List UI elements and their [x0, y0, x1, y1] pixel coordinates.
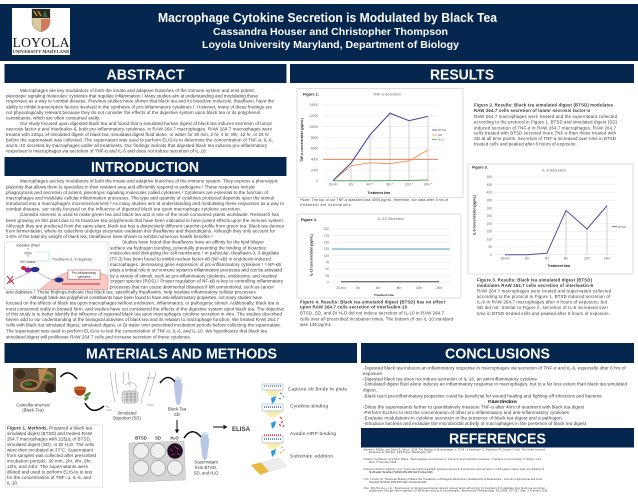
abstract text: ability to inhibit transcription factors involved in the synthesis of pro-inflammatory cytokines.². However, many of these findings are — [6, 105, 272, 110]
chart: figure 2 TNF-alpha secretion: 12000 — [309, 114, 318, 118]
heading: materials and methods: MATERIALS AND METHODS — [86, 346, 277, 362]
introduction text: focused on the effects of black tea upon macrophages without endotoxin, inflammatory, or pathogenic stimuli. Additionally, black tea is — [6, 301, 280, 306]
chart: figure 4 IL-10 secretion: Treatment time — [374, 293, 394, 297]
callout: figure 1 methods: for the concentration of TNF- α, IL-6, and — [7, 475, 91, 480]
chart: figure 4 IL-10 secretion: IL-10 Secretion — [378, 217, 404, 221]
abstract text — [6, 88, 274, 154]
caption: figure 3: SD did not. Similar to Figure 2, secretion of IL-6 increased over — [477, 305, 609, 310]
introduction text: The supernatant was used to perform ELISAs to test the concentration of TNF-α, IL-6, and IL-10. We hypothesize that black tea — [6, 329, 267, 334]
icon: black tea SD tube — [174, 377, 182, 405]
title: Macrophage Cytokine Secretion is Modulated by Black Tea — [158, 11, 498, 25]
chart: figure 3 IL-6 secretion: Treatment time — [548, 264, 571, 268]
note: TNF standard: *Note: The top of our TNF-α standard was 4000 pg/mL; therefore, our data after 4 hrs of — [300, 198, 448, 202]
chart: figure 2 TNF-alpha secretion: 4000 — [311, 158, 318, 162]
label: supernatant: SD, and H₂O — [194, 470, 219, 476]
chart: figure 2 TNF-alpha secretion: Figure 2. — [303, 92, 319, 96]
chart: figure 3 IL-6 secretion: 300 — [487, 206, 492, 210]
figure: NF-kB pathway diagram: IKK kinase — [20, 260, 36, 264]
introduction text: Although black tea polyphenol constituents have been found to have anti-inflammatory properties, not many studies have — [30, 295, 262, 300]
chart: figure 2 TNF-alpha secretion: TNF-α Secretion — [373, 92, 401, 96]
figure: NF-kB pathway diagram — [4, 242, 108, 290]
logo — [12, 8, 70, 55]
chart: figure 4 IL-10 secretion: 24hr — [436, 286, 443, 290]
authors: Cassandra Houser and Christopher Thompson — [213, 26, 448, 38]
label: plate columns: H₂O — [170, 436, 179, 441]
step 2: cytokine binding — [262, 404, 283, 417]
chart: figure 3 IL-6 secretion: IL-6 Secretion — [542, 168, 566, 172]
label: supernatant — [194, 460, 219, 476]
legend — [612, 225, 627, 229]
introduction text: oxygen species (ROS).⁵ Proper regulation of NF-κB is key to controlling inflammatory — [110, 279, 284, 284]
label: simulated digestion — [113, 410, 142, 421]
icon: supernatant tube — [200, 432, 209, 460]
note: TNF standard: treatment are estimations. — [300, 203, 352, 207]
heading: references — [361, 428, 634, 448]
introduction text: most consumed orally in brewed form, and studies have not considered the effects of the digestive system upon black tea. The objective — [6, 306, 284, 311]
abstract text: pleiotropic signaling molecules: cytokines that regulate inflammation.¹ Many studies aim at understanding and modulating these — [6, 93, 258, 98]
introduction text — [6, 179, 285, 339]
introduction text: plasticity that allows them to specialize in their resident area and efficiently respond to pathogens.¹ These responses include — [6, 184, 255, 189]
introduction text: and diabetes.⁵ These findings indicate that black tea, specifically theaflavins, help mediate inflammatory cellular processes. — [6, 290, 257, 295]
conclusions text: -Evaluate modulations in cytokine secretion in the presence of black tea digest and a pathogen. — [363, 415, 563, 420]
panel: conclusions — [361, 343, 634, 426]
labels: ELISA steps — [288, 386, 347, 460]
caption: figure 4: cells over all prescribed incubation times. The bottom of our IL-10 standard — [300, 316, 454, 321]
caption: figure 4: was 135 pg/mL — [300, 322, 332, 327]
icon: tea cup — [73, 386, 91, 401]
icon: digestive system sketch — [106, 372, 156, 410]
abstract text: before the supernatant was collected. The supernatant was used to perform ELISAs to determine the concentration of TNF-α, IL-6, — [6, 138, 273, 143]
chart: figure 2 TNF-alpha secretion: 4hr * — [367, 182, 374, 186]
chart: figure 2 TNF-alpha secretion: Treatment time — [368, 191, 391, 195]
figure: NF-kB pathway diagram: Pro-inflammatory — [72, 271, 97, 275]
abstract text: and IL-10 secreted by macrophages under all treatments. Our findings indicate that digested black tea induces pro-inflammatory — [6, 143, 268, 148]
references text: Web. 5 February 2018. — [369, 461, 397, 464]
caption: figure 2 — [474, 103, 618, 147]
labels: ELISA steps: Cytokine binding — [290, 404, 328, 410]
label: ELISA: ELISA — [232, 427, 251, 433]
chart: figure 3 IL-6 secretion: 12hr — [584, 257, 591, 261]
chart: figure 3 IL-6 secretion: 200 — [487, 222, 492, 226]
label: supernatant: Supernatant — [194, 460, 219, 465]
chart: figure 4 IL-10 secretion: 175 — [324, 234, 329, 238]
step 3: avadin-HRP — [262, 417, 284, 449]
caption: figure 4: Figure 4. Results: Black tea simulated digest (BTSD) has no effect — [300, 299, 446, 304]
references text: ¹Sanders, R Blair, and David E. Vance. 2009. The Biology of Macrophages. p 71-94. In Kaufmann S, Medzhitov R, Gordon S (ed), The Innate Immune — [363, 448, 546, 452]
chart: figure 4 IL-10 secretion: 0 — [327, 280, 329, 284]
chart: figure 3 IL-6 secretion: Figure 3. — [472, 166, 488, 170]
introduction text: surface via hydrogen bonding, potentially preventing the binding of bioactive — [110, 246, 266, 251]
panel: results — [290, 64, 634, 327]
chart: figure 2 TNF-alpha secretion: TNF-α concentration (pg/mL) — [300, 118, 304, 162]
arrow: tea to digestion — [85, 403, 104, 410]
photo: camellia sinensis — [13, 368, 56, 393]
chart: figure 4 IL-10 secretion: IL-10 concentration (pg/mL) — [310, 234, 314, 276]
references text: Chemistry. 59 (2011): 3780-3787. Web. 12 February 2018. — [369, 481, 427, 484]
chart: figure 3 IL-6 secretion: 0 — [490, 253, 492, 257]
caption: figure 4 — [300, 299, 454, 327]
caption: figure 3: RAW 264.7 macrophages were treated and supernatant collected — [477, 289, 612, 294]
figure: NF-kB pathway diagram: Theaflavin-3, 3'-digallate — [52, 258, 92, 262]
caption: figure 3: modulates RAW 264.7 cells secretion of interleukin-6 — [477, 283, 594, 288]
chart: figure 4 IL-10 secretion: 30 min — [336, 286, 346, 290]
abstract text: responses in macrophages via secretion of TNF-α and IL-6 and does not induce secretion of IL-10. — [6, 149, 207, 154]
caption: figure 2: cells treated with BTSD secreted more TNF-α than those treated with — [474, 130, 617, 135]
conclusions text: -Black tea's pro-inflammatory properties could be beneficial for wound healing and fighting off infections and bacteria — [363, 393, 602, 398]
arrow: digestion to black tea SD — [160, 378, 176, 383]
label: camellia sinensis: (Black Tea) — [22, 408, 44, 412]
label: camellia sinensis: Camellia sinensis — [16, 402, 50, 408]
chart: figure 3 IL-6 secretion: 4hr — [545, 257, 550, 261]
introduction text: combat disease, our study focused on the influence of digested black tea upon macrophage cytokine secretion. — [6, 206, 241, 211]
conclusions text: -Dilute the supernatants further to quantitatively measure TNF-α after 4hrs of treatment with black tea digest — [363, 404, 585, 409]
legend: SD — [438, 133, 443, 137]
abstract text: treated with 225μL of simulated digest of black tea, simulated digest fluid alone, or water for 30 min, 2 hr, 4 hr, 8hr, 12 hr, or 24 hr — [6, 132, 270, 137]
chart: figure 4 IL-10 secretion: 2hr — [356, 286, 361, 290]
figure: NF-kB pathway diagram: cytokines — [77, 275, 91, 279]
subheading: future directions: Future Directions — [488, 399, 517, 404]
heading: abstract: ABSTRACT — [106, 66, 184, 84]
introduction text: phagocytosis and secretion of potent, pleiotropic signaling molecules called cytokines.² Cytokines are essential to the function of — [6, 190, 269, 195]
abstract text: Our study focused upon digested black tea and found that a simulated human digest of black tea induces secretion of tumor — [20, 121, 272, 126]
conclusions text: -Perform ELISAs to test the concentration of other pro-inflammatory and anti-inflammatory cytokines — [363, 410, 570, 415]
callout: figure 1 methods: Figure 1. Methods. Prepared a black tea — [7, 426, 92, 431]
heading: references: REFERENCES — [449, 430, 546, 448]
diagram: ELISA steps — [251, 384, 287, 475]
conclusions text: digest. — [363, 388, 377, 393]
chart: figure 2 TNF-alpha secretion: 2hr — [349, 182, 354, 186]
callout: figure 1 methods: IL-10. — [7, 481, 18, 486]
chart: figure 4 IL-10 secretion: 100 — [324, 254, 329, 258]
chart: figure 4 IL-10 secretion: 75 — [325, 260, 329, 264]
heading: results — [290, 64, 634, 84]
chart: figure 3 IL-6 secretion: 250 — [487, 214, 492, 218]
label: supernatant: from BTSD, — [195, 465, 217, 470]
chart: figure 4 IL-10 secretion: 50 — [325, 267, 329, 271]
chart: figure 2 TNF-alpha secretion: 2000 — [311, 168, 318, 172]
introduction text: by a variety of stimuli, such as pro-inflammatory cytokines, endotoxins, and reactive — [110, 273, 277, 278]
introduction text: cells with black tea simulated digest, simulated digest, or DI water over prescribed incubation periods before collecting the supernatant. — [6, 323, 281, 328]
chart: figure 4 IL-10 secretion: 25 — [325, 274, 329, 278]
chart: figure 3 IL-6 secretion: 150 — [487, 230, 492, 234]
references text: ²Chazot, Guillaume, and Marc Dalod. "Macrophages Involvement in Immunity and Infectious diseases". Frontiers in Immunology 5 (2014): 1-12. — [363, 458, 542, 461]
label: black tea SD: SD — [174, 412, 180, 417]
affiliation: Loyola University Maryland, Department of Biology — [202, 39, 459, 51]
chart: figure 4 IL-10 secretion: 4hr — [376, 286, 381, 290]
chart: figure 3 IL-6 secretion: 24hr — [604, 257, 611, 261]
figure: NF-kB pathway diagram: Oxidative stimuli — [16, 244, 40, 248]
introduction text: (TF-3) has been found to inhibit nuclear factor-κB (NF-κB) in endotoxin-induced — [110, 257, 271, 262]
chart: figure 4 IL-10 secretion — [297, 214, 461, 298]
callout: figure 1 methods: 264.7 macrophages with 225μL of BTSD, — [7, 437, 91, 442]
callout: figure 1 methods: incubation periods: 30 min, 2hr, 4hr, 8hr, — [7, 459, 92, 464]
labels: ELISA steps: Capture Ab binds to plate — [288, 386, 347, 392]
arrow: to ELISA — [213, 425, 228, 429]
chart: figure 2 TNF-alpha secretion: 8hr * — [387, 182, 394, 186]
heading: abstract — [4, 64, 286, 84]
caption: figure 4: BTSD, SD, and DI H₂O did not induce secretion of IL-10 in RAW 264.7 — [300, 310, 445, 315]
heading: results: RESULTS — [430, 66, 494, 84]
conclusions text — [363, 366, 627, 426]
caption: figure 3: Figure 3. Results: Black tea simulated digest (BTSD) — [477, 277, 593, 282]
chart: figure 3 IL-6 secretion: 50 — [488, 245, 492, 249]
label: simulated digestion: Digestion (SD) — [113, 416, 142, 421]
label: black tea SD — [168, 407, 187, 417]
chart: figure 3 IL-6 secretion: 30min — [501, 257, 510, 261]
step 4: substrate — [251, 447, 287, 475]
conclusions text: -Digested black tea does not induce secretion of IL-10, an anti-inflammatory cytokine — [363, 376, 537, 381]
caption: figure 4: upon RAW 264.7 cells secretion of interleukin-10 — [300, 305, 408, 310]
callout: figure 1 methods: diluted and used to perform ELISAs to test — [7, 470, 93, 475]
introduction text: processes that can cause detrimental diseases if left unmonitored, such as cancer — [110, 284, 274, 289]
figure: NF-kB pathway diagram: ROS — [25, 252, 31, 256]
caption: figure 3: IL-6 in RAW 264.7 macrophages after 4 hours of exposure, but — [477, 299, 608, 304]
chart: figure 2 TNF-alpha secretion: 12hr * — [405, 182, 414, 186]
introduction text: Macrophages are key modulators of both the innate and adaptive branches of the immune system. They express a phenotypic — [20, 179, 279, 184]
chart: figure 2 TNF-alpha secretion: 30min — [329, 182, 338, 186]
panel: references — [361, 428, 634, 493]
chart: figure 2 TNF-alpha secretion: 24hr * — [424, 182, 433, 186]
panel: abstract — [4, 64, 286, 154]
introduction text: 2-6% of the total dry weight of black tea, theaflavins have shown to exhibit numerous health benefits.⁴ — [6, 234, 213, 239]
callout: figure 1 methods: were then incubated at 37°C. Supernatant — [7, 448, 94, 453]
chart: figure 4 IL-10 secretion: 8hr — [397, 286, 402, 290]
chart: figure 3 IL-6 secretion: IL-6 concentration (pg/mL) — [472, 195, 476, 235]
header banner — [0, 4, 638, 61]
caption: figure 3: according to the protocol in Figure 1. BTSD induced secretion of — [477, 294, 611, 299]
introduction text: been growing on this plant due to its bioactive tea polyphenols that have been indicated to have potent effects upon the immune system. — [6, 218, 284, 223]
conclusions text: -Digested black tea induces an inflammatory response in macrophages via secretion of TNF-α and IL-6, especially after 8 hrs of — [363, 366, 626, 371]
chart: figure 2 TNF-alpha secretion: 10000 — [309, 125, 318, 129]
references text: ³Gutierrez-Orozco, Fabiola, et al. "Green and black tea inhibit cytokine-induced IL-8 production and secretion in AGS gastric cancer cells via inhibition of — [363, 468, 544, 471]
caption: figure 2: according to the protocol in Figure 1. BTSD and simulated digest (SD) — [474, 120, 618, 125]
arrow: plate to supernatant — [184, 432, 201, 438]
caption: figure 2: Figure 2. Results: Black tea simulated digest (BTSD) modulates — [474, 103, 614, 108]
conclusions text: -Simulated digest fluid alone induces an inflammatory response in macrophages, but to a far less extent than black tea simulated — [363, 382, 627, 387]
heading: materials and methods — [4, 343, 357, 363]
introduction text: introduced into a macrophage's microenvironment.³ As many studies aim at understanding and modulating these responses as a way to — [6, 201, 284, 206]
introduction text: of this study is to better identify the influence of ingested black tea upon macrophages cytokine secretion in vitro. The studies described — [6, 312, 282, 317]
caption: figure 2: SD at all time points. Secretion of TNF-α increased over time in BTSD — [474, 136, 616, 141]
chart: figure 3 IL-6 secretion: 100 — [487, 237, 492, 241]
conclusions text: -Introduce bacteria and evaluate the microbicidal activity of macrophages in the presence of black tea digest — [363, 421, 587, 426]
panel: introduction — [4, 157, 286, 339]
chart: figure 3 IL-6 secretion: 8hr — [564, 257, 569, 261]
labels: ELISA steps: Avadin-HRP binding — [290, 431, 336, 437]
step 1: capture Ab — [262, 384, 284, 404]
arrow: down to plate — [175, 420, 179, 434]
references text — [363, 448, 548, 493]
chart: figure 3 IL-6 secretion: 350 — [487, 198, 492, 202]
heading: introduction — [4, 157, 286, 176]
chart: figure 3 IL-6 secretion: 500 — [487, 175, 492, 179]
introduction text: macrophages and modulate cellular inflammation processes. The type and quantity of cytokines produced depends upon the stimuli — [6, 195, 274, 200]
chart: figure 4 IL-10 secretion: 12hr — [416, 286, 423, 290]
heading: conclusions — [361, 343, 634, 363]
references text: Response to Infection. ASM Press, Washington, DC. — [369, 451, 432, 454]
logo: UNIVERSITY MARYLAND — [12, 50, 70, 54]
references text: ⁴Yeh, Timothy W. "Molecular Binding of Black Tea Theaflavins to Biological Membranes: Relationship to Bioactivities". Journal of Agricultural and Food — [363, 477, 543, 481]
introduction text: herein add to our understanding of the biological activities of black tea and its relation to macrophage function. We treated RAW 264.7 — [6, 317, 279, 322]
references text: polyphenols through down-regulation of IκB kinase activity in macrophages". Biochemical Pharmacology. 59 (2000): 357-367. Web. 5 February 2018. — [369, 490, 548, 493]
abstract text: not physiologically relevant because they do not consider the effects of the digestive system upon black tea or its polyphenol — [6, 110, 260, 115]
label: plate columns: SD — [155, 436, 161, 441]
heading: introduction: INTRODUCTION — [91, 160, 199, 176]
callout: figure 1 methods: simulated digest (SD), or DI H₂O. The cells — [7, 442, 95, 447]
introduction text: Camellia sinensis is used to make green tea and black tea and is one of the most-consumed plants worldwide. Research has — [20, 212, 280, 217]
chart: figure 3 IL-6 secretion: 400 — [487, 191, 492, 195]
chart: figure 3 IL-6 secretion: 450 — [487, 183, 492, 187]
legend: H₂O — [438, 138, 444, 142]
chart: figure 3 IL-6 secretion — [468, 164, 633, 274]
chart: figure 2 TNF-alpha secretion: 8000 — [311, 136, 318, 140]
callout: figure 1 methods — [6, 425, 102, 487]
introduction text: Although they are produced from the same plant, black tea has a distinctively different catechin profile from green tea. Black tea derives — [6, 223, 285, 228]
legend: BTSD — [618, 225, 627, 229]
introduction text: molecules and disrupting the cell membrane.⁴ In particular, theaflavin-3, 3-digallate — [110, 251, 279, 256]
callout: figure 1 methods: simulated digest (BTSD) and treated RAW — [7, 431, 93, 436]
callout: figure 1 methods: 12hr, and 24hr. The supernatants were — [7, 464, 88, 469]
chart: figure 4 IL-10 secretion: Figure 4. — [301, 218, 317, 222]
chart: figure 4 IL-10 secretion: 125 — [324, 247, 329, 251]
legend — [432, 128, 447, 142]
legend: BTSD — [438, 128, 447, 132]
logo: LOYOLA — [12, 36, 70, 51]
references text: NF-κB activity". Planta Med. 76 (2010): 1659-1665. Web. 5 February 2018. — [369, 471, 433, 474]
conclusions text: exposure — [363, 371, 382, 376]
caption: figure 3: time in BTSD treated cells and peaked after 8 hours of exposure. — [477, 311, 610, 316]
note: TNF standard — [300, 198, 448, 207]
label: simulated digestion: Simulated — [117, 410, 137, 415]
chart: figure 4 IL-10 secretion: 150 — [324, 240, 329, 244]
chart: figure 4 IL-10 secretion: 200 — [324, 227, 329, 231]
icon: six-well plate — [129, 441, 186, 482]
abstract text: responses as a way to combat disease. Previous studies have shown that black tea and its bioactive molecule, theaflavin, have the — [6, 99, 274, 104]
introduction text: simulated digest will proliferate RAW 264.7 cells and increase secretion of these cytokines. — [6, 334, 191, 339]
abstract text: necrosis factor-α and interleukin-6, both pro-inflammatory cytokines, in RAW 264.7 macrophages. RAW 264.7 macrophages were — [6, 127, 272, 132]
caption: figure 2: induced secretion of TNF-α in RAW 264.7 macrophages. RAW 264.7 — [474, 125, 617, 130]
introduction text: macrophages, decreasing gene expression of pro-inflammatory cytokines.⁵ ⁶ NF-κB — [110, 262, 281, 267]
chart: figure 2 TNF-alpha secretion: 0 — [316, 179, 318, 183]
caption: figure 2: RAW 264.7 cells secretion of tumor necrosis factor-α — [474, 108, 590, 113]
chart: figure 3 IL-6 secretion: 2hr — [525, 257, 530, 261]
callout: figure 1 methods: from samples was collected after prescribed — [7, 453, 96, 458]
label: plate columns — [135, 436, 179, 441]
caption: figure 2: treated cells and peaked after 8 hours of exposure. — [474, 142, 577, 147]
label: plate columns: BTSD — [135, 436, 147, 441]
caption: figure 3 — [477, 277, 612, 316]
introduction text: from fermentation, where its catechins undergo enzymatic oxidation into theaflavins and thearubigens. Although they only account for — [6, 229, 276, 234]
references text: ⁵Pan, Min-Hsiung, et al. "Suppression of lipopolysaccharide-induced nuclear factor-κB activity by theaflavin-3,3'-digallate from black tea and other — [363, 486, 545, 490]
heading: conclusions: CONCLUSIONS — [445, 346, 550, 362]
label: camellia sinensis — [16, 402, 50, 412]
labels: ELISA steps: Substrate addition — [290, 454, 333, 460]
introduction text: Studies have found that theaflavins have an affinity for the lipid bilayer — [122, 240, 264, 245]
chart: figure 2 TNF-alpha secretion: 6000 — [311, 147, 318, 151]
introduction text: plays a critical role in our immune system's inflammatory processes and can be activated — [110, 267, 282, 272]
panel: materials and methods — [4, 343, 357, 487]
abstract text: constituents, which are often consumed orally. — [6, 116, 100, 121]
arrow: leaf to tea — [60, 373, 77, 379]
chart: figure 2 TNF-alpha secretion: 14000 — [309, 103, 318, 107]
caption: figure 2: RAW 264.7 macrophages were treated and the supernatant collected — [474, 114, 618, 119]
abstract text: Macrophages are key modulators of both the innate and adaptive branches of the immune system and emit potent, — [20, 88, 255, 93]
label: black tea SD: Black Tea — [168, 407, 187, 412]
chart: figure 2 TNF-alpha secretion — [297, 88, 463, 198]
